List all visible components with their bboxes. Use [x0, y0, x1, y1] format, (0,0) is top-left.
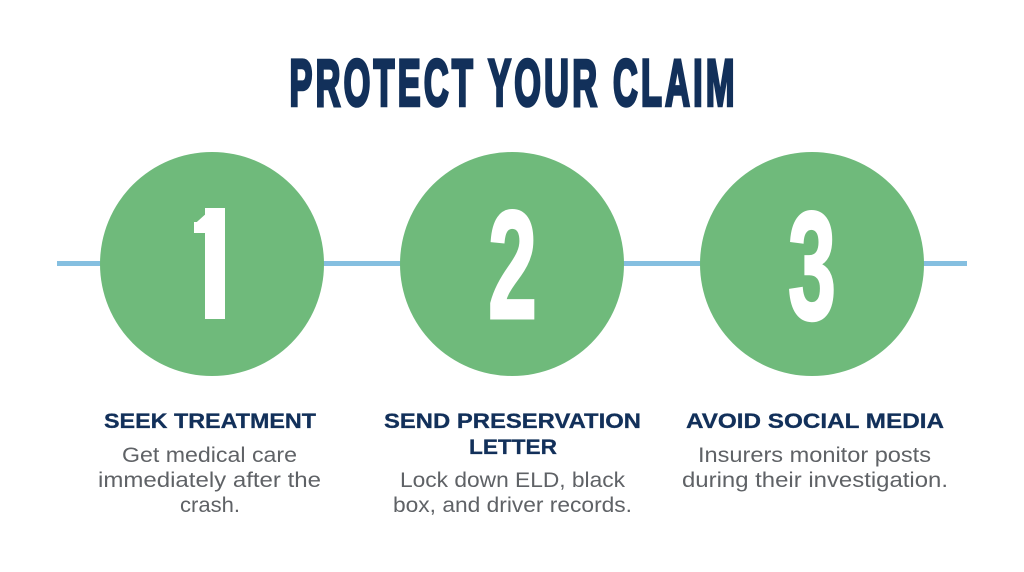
- step 1 number badge: 1: [182, 180, 244, 352]
- step 2 text: [384, 410, 641, 517]
- step 2 text: Lock down ELD, black: [400, 469, 626, 492]
- step 2 text: LETTER: [469, 436, 557, 459]
- step 3 number badge: 3: [788, 180, 836, 352]
- step 3 text: Insurers monitor posts: [698, 444, 931, 467]
- step 1 text: Get medical care: [122, 444, 297, 467]
- step 3 text: [682, 410, 948, 492]
- step 1 text: [98, 410, 321, 517]
- step 2 number badge: 2: [488, 179, 537, 351]
- step 2 text: box, and driver records.: [393, 494, 632, 517]
- step 2 text: SEND PRESERVATION: [384, 410, 641, 433]
- title: PROTECT YOUR CLAIM: [290, 47, 738, 121]
- step 1 text: SEEK TREATMENT: [104, 410, 316, 433]
- step 1 text: immediately after the: [98, 469, 321, 492]
- step 3 number badge: [700, 152, 924, 376]
- step 2 number badge: [400, 152, 624, 376]
- step 3 text: during their investigation.: [682, 469, 948, 492]
- step 1 text: crash.: [180, 494, 240, 517]
- step 3 text: AVOID SOCIAL MEDIA: [686, 410, 944, 433]
- step 1 number badge: [100, 152, 324, 376]
- connecting timeline line: [57, 261, 967, 266]
